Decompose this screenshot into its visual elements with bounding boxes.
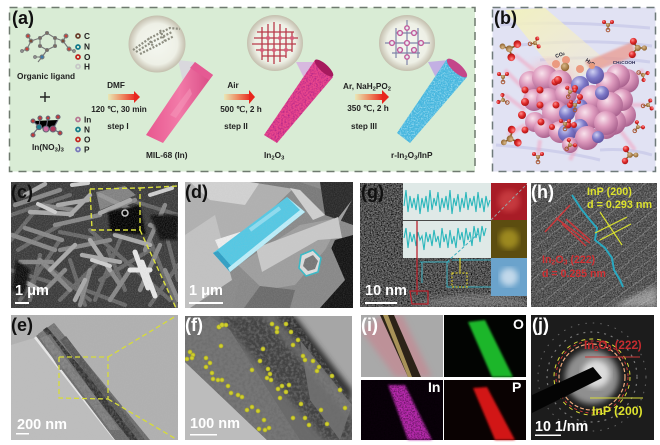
text: In2O3 (222) d: 2: [551, 260, 555, 266]
legend: ligand atoms: H: [84, 62, 90, 72]
legend: salt atoms: P: [84, 144, 90, 154]
scale bar j: 10 1/nm: [535, 419, 588, 435]
panel label f: (f): [185, 315, 203, 335]
text: In2O3: O: [275, 150, 282, 160]
text: In2O3 (222): 2: [594, 344, 598, 353]
icons: free molecules: [496, 20, 654, 164]
dashed border b: [492, 8, 656, 172]
panel label c: (c): [11, 182, 33, 202]
panel label b: (b): [494, 8, 517, 28]
particle cluster: [519, 61, 639, 153]
cyan highlighted rod: [213, 197, 305, 272]
text: step II conditions: Air: [227, 81, 240, 90]
FFT blue: [491, 258, 527, 296]
panel label d: (d): [185, 182, 208, 202]
arrow: step I: [108, 91, 140, 103]
text: step III conditions: PO: [376, 82, 388, 91]
text: r-In2O3/InP: 3: [414, 156, 418, 162]
scale bar c: 1 μm: [15, 283, 49, 299]
scale bar d: 1 μm: [189, 283, 223, 299]
plus sign: [40, 92, 50, 102]
text: InP (200) d: InP (200): [587, 186, 632, 198]
FFT yellow: [491, 220, 527, 258]
text: step I conditions: 120 ℃, 30 min: [91, 105, 147, 114]
text: InP (200) d: [587, 187, 652, 208]
diffraction rings: [538, 323, 646, 431]
text: In(NO3)3: 3: [55, 148, 59, 154]
legend: salt atoms: N: [84, 124, 90, 134]
icon: In2O3 porous rod: [264, 57, 336, 143]
icon: product molecule: [629, 38, 647, 58]
panel label g: (g): [361, 182, 384, 202]
panel: In map: [361, 379, 443, 440]
text: In2O3 (222): In: [584, 340, 594, 352]
text: step III conditions: 350 ℃, 2 h: [347, 104, 389, 113]
legend: salt atoms: In: [84, 114, 91, 124]
nanotube: [36, 323, 150, 440]
panel: P map: P: [512, 379, 521, 395]
magnifier: MIL-68: [128, 16, 195, 82]
panel: TEM detail with particles (f): [185, 315, 352, 440]
porous tube body: [185, 316, 352, 440]
panel: O map: [444, 315, 526, 377]
text: step III conditions: step III: [351, 122, 377, 131]
hexagon tube: [244, 250, 321, 308]
magnifier: In2O3: [247, 15, 317, 80]
text: In2O3 (222) d: 3: [564, 260, 568, 266]
magnifier: r-In2O3/InP: [379, 15, 449, 82]
text: r-In2O3/InP: O: [408, 150, 415, 160]
text: In2O3: 3: [281, 156, 285, 162]
panel: synthesis scheme (a): [10, 8, 475, 172]
nanoparticle markers: [185, 322, 347, 432]
panel label e: (e): [11, 315, 33, 335]
text: r-In2O3/InP: 2: [404, 156, 408, 162]
text: In2O3 (222) d: (222): [567, 254, 595, 266]
text: In2O3 (222) d: In: [542, 254, 551, 266]
text: organic ligand: Organic ligand: [17, 71, 75, 81]
panel label h: (h): [531, 182, 554, 202]
arrow: step II: [224, 90, 255, 104]
panel label i: (i): [361, 315, 378, 335]
beam stop: [532, 367, 602, 413]
line profile box: [403, 183, 491, 258]
text: In2O3: In: [264, 150, 271, 160]
text: InP (200): InP (200): [592, 404, 643, 418]
icon: organic ligand molecule: [21, 32, 75, 62]
panel: In map: In: [428, 379, 440, 395]
text: InP (200) d: d = 0.293 nm: [587, 199, 652, 211]
panel: HRTEM lattice (h): [531, 183, 657, 307]
nanorods: [10, 183, 178, 310]
zoom region box: [59, 316, 176, 439]
text: In(NO3)3: 3: [61, 148, 65, 154]
scale bar c: [15, 285, 48, 304]
panel: TEM rod (e): [11, 315, 178, 440]
InP lattice marker: [595, 212, 631, 245]
panel: TEM map base (i): [361, 315, 443, 377]
icon: r-In2O3/InP blue rod: [397, 56, 470, 143]
panel: SEM single rod (d): [185, 182, 353, 308]
panel: SEM overview (c): [10, 182, 178, 310]
FFT red: [491, 183, 527, 220]
text: step III conditions: Ar, NaH: [343, 82, 373, 91]
panel label j: (j): [532, 315, 549, 335]
product stream: [585, 42, 636, 72]
text: In2O3 (222): 3: [607, 344, 612, 353]
red oxygen atoms on cluster: [518, 76, 583, 134]
text: In2O3 (222) d: d = 0.285 nm: [542, 268, 606, 280]
scale bar f: 100 nm: [190, 416, 240, 432]
In2O3 lattice marker: [545, 205, 590, 246]
text: step I conditions: [91, 81, 147, 131]
legend: ligand atoms: C: [84, 31, 90, 41]
text: step III conditions: 2: [373, 86, 376, 92]
icon: H2O molecule: [576, 63, 595, 73]
panel: catalysis scheme (b): [492, 8, 656, 172]
icon: CO2 molecule: [552, 56, 570, 71]
text: CO2: CO2: [555, 51, 566, 60]
text: In(NO3)3: In(NO: [32, 142, 55, 152]
scale bar g: 10 nm: [365, 283, 407, 299]
text: H2O: H2O: [584, 58, 596, 69]
text: In2O3 (222) d: O: [555, 254, 564, 266]
legend: ligand atoms: N: [84, 42, 90, 52]
panel label a: (a): [12, 8, 34, 28]
text: step II conditions: step II: [224, 122, 248, 131]
arrow: step III: [355, 90, 389, 104]
text: CH3COOH: CH3COOH: [613, 60, 636, 65]
legend: salt atoms: [76, 114, 91, 154]
text: step II conditions: [220, 81, 262, 131]
legend: ligand atoms: O: [84, 52, 91, 62]
icon: In(NO3)3 molecule: [31, 115, 62, 137]
gray rod: [256, 217, 342, 272]
dark gap: [108, 205, 146, 235]
text: In2O3 (222) d: [542, 255, 606, 277]
scale bar g: [365, 285, 406, 304]
panel: HRTEM with profiles (g): [360, 182, 527, 307]
legend: salt atoms: O: [84, 134, 91, 144]
phase boundary: [572, 195, 623, 287]
pink reaction rays: [505, 55, 645, 160]
light beam: [505, 8, 608, 85]
panel: P map: [444, 379, 526, 440]
text: r-In2O3/InP: r-In: [391, 150, 404, 160]
legend: ligand atoms: [76, 31, 91, 72]
panel: SAED pattern (j): [531, 315, 654, 440]
text: In2O3: 2: [271, 156, 275, 162]
text: step III conditions: 2: [388, 86, 391, 92]
label lines: [585, 356, 640, 358]
scale bar e: 200 nm: [17, 417, 67, 433]
text: In2O3 (222): O: [598, 340, 607, 352]
icon: MIL-68 pink rod: [146, 62, 213, 143]
text: step I conditions: step I: [107, 122, 129, 131]
text: step III conditions: [343, 82, 391, 131]
text: r-In2O3/InP: /InP: [417, 150, 433, 160]
selection markers: [410, 184, 527, 304]
text: step I conditions: DMF: [107, 81, 125, 90]
text: MIL-68 (In): MIL-68 (In): [146, 150, 188, 160]
text: step II conditions: 500 ℃, 2 h: [220, 105, 262, 114]
text: In2O3 (222): (222): [612, 340, 642, 352]
panel: O map: O: [513, 316, 524, 332]
zoom region box: [90, 186, 178, 308]
text: In(NO3)3: ): [58, 142, 61, 152]
